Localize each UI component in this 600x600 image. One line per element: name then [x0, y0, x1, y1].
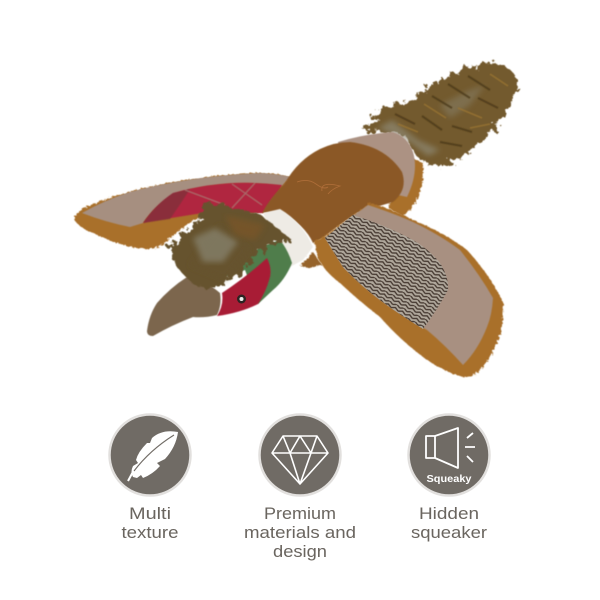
left wing taupe panel	[82, 173, 290, 227]
body rear taupe	[338, 132, 415, 197]
label: hidden squeaker: Hidden	[419, 504, 479, 523]
icon: diamond	[260, 414, 340, 496]
feature: hidden squeaker	[408, 414, 490, 542]
green neck	[215, 240, 292, 304]
label: hidden squeaker: squeaker	[411, 523, 487, 542]
icon: speaker: Squeaky	[426, 473, 472, 485]
body brown	[262, 142, 404, 243]
embroidered logo	[297, 180, 340, 194]
small under fur	[300, 252, 322, 268]
left wing fur trim	[74, 173, 290, 249]
label: premium materials and design: Premium	[264, 504, 336, 523]
red face	[217, 258, 271, 316]
beak	[147, 277, 221, 336]
neck fur ruff	[168, 203, 292, 290]
left wing red tartan	[143, 183, 282, 223]
label: multi texture	[122, 504, 178, 542]
label: premium materials and design	[244, 504, 356, 561]
feature: multi texture	[110, 414, 190, 542]
toy pheasant	[74, 62, 518, 377]
right tail underside fur	[388, 158, 423, 216]
right wing taupe panel	[325, 205, 493, 365]
label: premium materials and design: design	[273, 542, 327, 561]
right wing fur trim	[314, 203, 503, 377]
white collar	[263, 209, 313, 268]
tail feathers	[365, 62, 518, 165]
eye	[237, 294, 246, 304]
icon: feather	[110, 414, 190, 496]
label: premium materials and design: materials and	[244, 523, 356, 542]
label: hidden squeaker	[411, 504, 487, 542]
label: multi texture: texture	[122, 523, 178, 542]
right wing herringbone	[325, 215, 448, 329]
feature: premium materials	[244, 414, 356, 561]
label: multi texture: Multi	[129, 504, 171, 523]
